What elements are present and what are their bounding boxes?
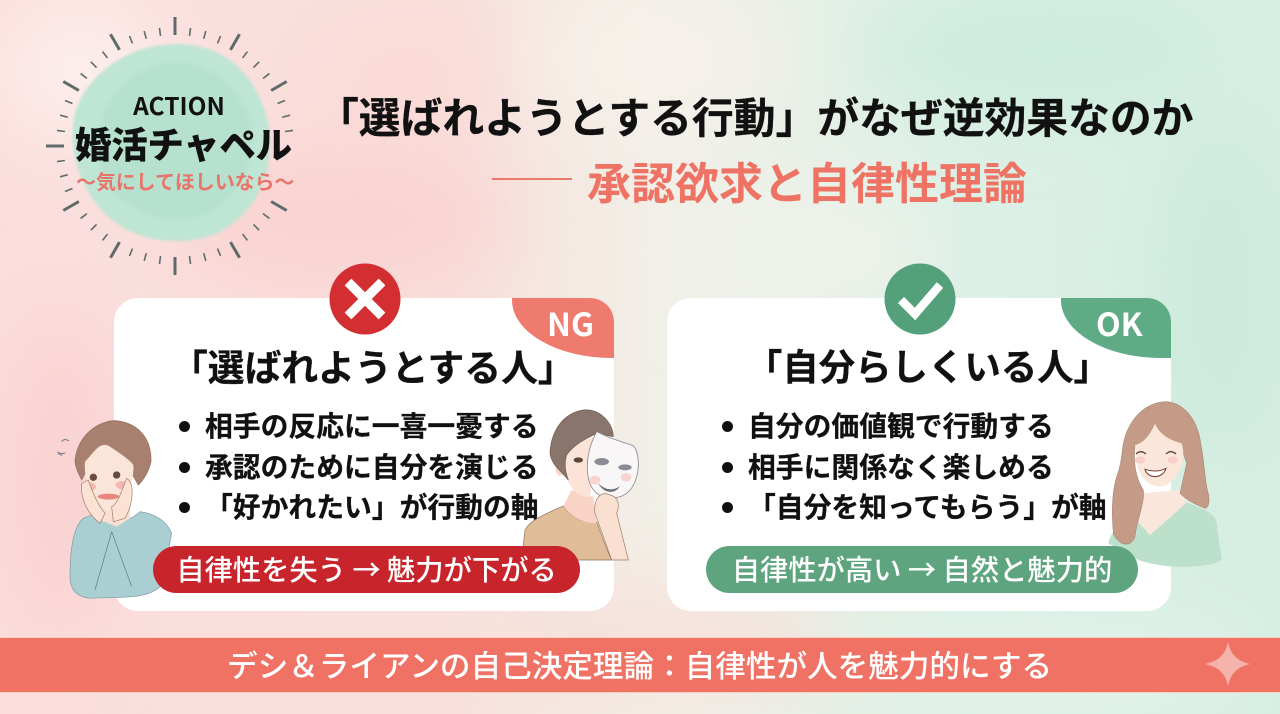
logo text: tagline: 〜気にしてほしいなら〜 [76,166,294,195]
NG heading: 「選ばれようとする人」 [171,338,575,392]
NG conclusion pill: 自律性を失う → 魅力が下がる [176,548,557,589]
panel: OK [667,298,1171,611]
OK item 3: 「自分を知ってもらう」が軸 [748,486,1107,526]
logo text: brand name: 婚活チャペル [75,116,292,169]
OK corner tag [1061,298,1171,358]
logo: action badge [46,17,294,275]
OK conclusion pill: 自律性が高い → 自然と魅力的 [732,548,1112,589]
banner text: デシ＆ライアンの自己決定理論：自律性が人を魅力的にする [227,642,1052,686]
title: 「選ばれようとする行動」がなぜ逆効果なのか [317,86,1193,146]
OK heading: 「自分らしくいる人」 [746,339,1110,391]
panel: NG [114,298,614,611]
illustration: smiling woman [1108,401,1222,567]
illustration: man holding mask [522,410,639,560]
illustration: worried woman [57,420,172,599]
OK label: OK [1096,300,1143,346]
bottom banner [0,637,1280,693]
OK item 1: 自分の価値観で行動する [748,405,1054,445]
NG item 1: 相手の反応に一喜一憂する [205,405,539,445]
NG corner tag [512,298,614,358]
OK item 2: 相手に関係なく楽しめる [748,446,1054,486]
sunburst with watercolor circle [46,17,294,275]
NG item 2: 承認のために自分を演じる [205,446,539,486]
icon: sparkle [1206,642,1250,686]
icon: check badge [884,264,956,334]
subtitle text: 承認欲求と自律性理論 [587,148,1027,212]
NG list [179,405,539,526]
NG label: NG [547,300,594,346]
OK list [722,405,1107,526]
NG item 3: 「好かれたい」が行動の軸 [205,486,539,526]
subtitle dash [492,178,572,180]
icon: X badge [330,264,400,334]
logo text: ACTION: ACTION [133,88,225,123]
